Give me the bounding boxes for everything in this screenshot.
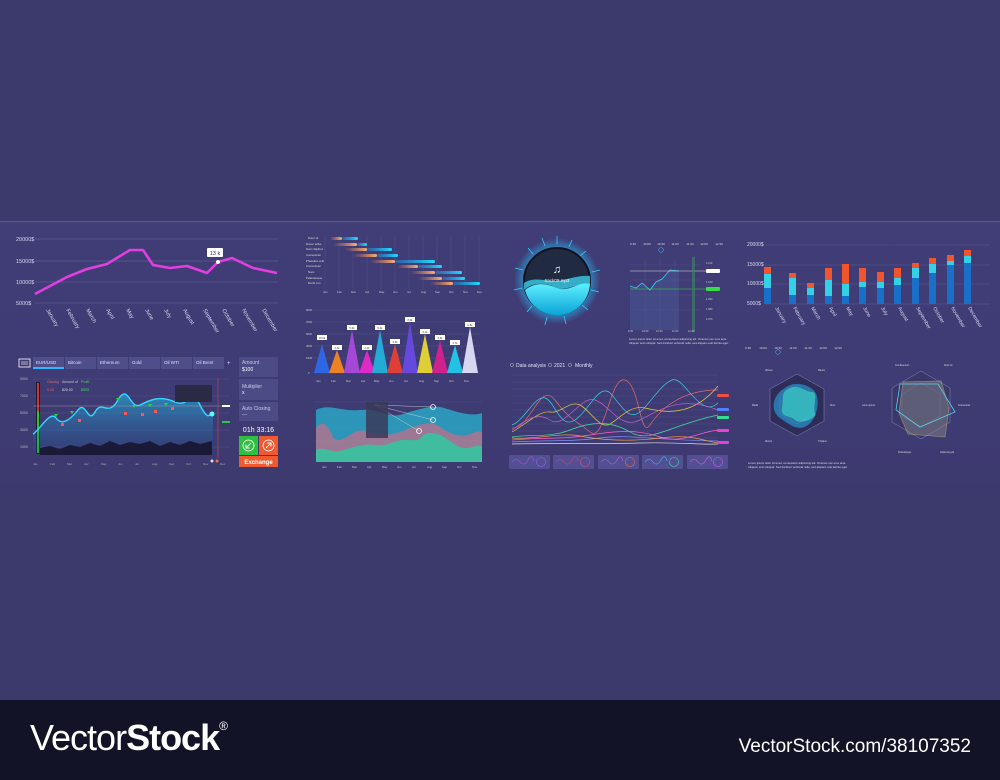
panel: music player [514,236,600,325]
panel: stacked 3D bar chart: May [844,306,854,318]
panel: stacked 3D bar chart: January [773,306,788,325]
month labels: December [260,308,278,333]
month labels: September [201,308,220,334]
panel: small time line chart: 1.110 [706,261,713,265]
panel: stacked 3D bar chart: February [791,306,807,327]
panel: layered area chart: Apr [367,465,371,469]
panel: small time line chart: 1.070 [706,317,713,321]
panel: stacked 3D bar chart: August [896,306,910,323]
multiplier box: Multiplier [242,384,262,390]
panel: gantt chart: May [379,290,385,294]
panel: small time line chart: 11:30 [688,329,695,333]
panel: cone spike chart: Nov [464,379,470,383]
chart area: 9000 [20,377,28,381]
y axis labels: 5000$ [16,301,31,307]
caption: Lorem ipsum dolor sit amet, consectetur adipiscing elit. Vivamus nec eros ante. [748,461,846,465]
tabs: Ethereum [100,360,120,365]
panel: cone spike chart: 5.0k [378,326,383,330]
chart area: Jan [33,462,38,466]
panel: cone spike chart: 4.3k [438,336,443,340]
chart area: 5000 [20,411,28,415]
caption [748,461,848,469]
tabs: EUR/USD [36,360,57,365]
tabs: Gold [132,360,142,365]
panel: stacked 3D bar chart: 15000$ [747,262,764,268]
panel: cone spike chart: 5.1k [423,330,428,334]
panel: gantt chart: Mar [351,290,356,294]
logo text: VectorStock® [30,717,227,758]
month labels: May [124,308,135,320]
panel: small time line chart: 11:00 [672,329,679,333]
panel: cone spike chart: May [374,379,380,383]
panel: layered area chart: Aug [427,465,432,469]
panel: gantt chart: Jul [407,290,411,294]
panel: cone spike chart: 5000 [306,332,313,336]
panel: cone spike chart: Jan [316,379,321,383]
buttons [239,436,258,455]
panel: gantt chart: Feb [337,290,342,294]
panel: layered area chart: Jul [412,465,416,469]
chart area: Feb [50,462,56,466]
panel: layered area chart: Feb [337,465,342,469]
chart area: 7000 [20,394,28,398]
panel: cone spike chart: 5.0k [350,326,355,330]
tooltip 13 k: 13 k [210,251,220,257]
panel: stacked 3D bar chart: 5000$ [747,301,761,307]
month labels: July [162,308,172,320]
month labels: March [84,308,97,324]
chart area: $20.00 [62,388,73,392]
panel: layered area chart: Mar [352,465,357,469]
chart area: Mar [67,462,72,466]
panel: cone spike chart: 15.0k [319,336,326,340]
panel: stacked 3D bar chart: September [914,306,932,330]
glow ring [514,238,600,324]
month labels: June [143,308,154,321]
panel: gantt chart [306,235,483,294]
panel: small time line chart: 10:30 [657,242,665,246]
chart area: Jul [135,462,139,466]
y axis labels: 15000$ [16,259,34,265]
panel: radar charts: 10:00 [759,346,767,350]
panel: small time line chart: 1.100 [706,280,713,284]
chart area: May [101,462,107,466]
panel: small time line chart: 10:00 [642,329,649,333]
chart area: 1000 [20,445,28,449]
panel: gantt chart: Aug [421,290,426,294]
panel: stacked 3D bar chart: June [861,306,872,319]
panel: radar charts: Ultrices [765,369,774,372]
panel: radar charts: Adipiscing elit [940,451,954,454]
panel: small time line chart: 1.090 [706,297,713,301]
amount box: Amount [242,360,260,366]
caption: Aliquam erat volutpat. Sed tincidunt vehicula nulla, sed aliquam erat lacinia eget. [629,341,729,345]
chart area: $333 [81,388,89,392]
panel: gantt chart: Dolor sit [308,236,318,240]
panel: radar charts: 12:00 [819,346,827,350]
panel: small time line chart: 10:00 [643,242,651,246]
icon: monitor [19,359,30,367]
panel: layered area chart: Jun [397,465,402,469]
panel: radar charts: 11:30 [804,346,812,350]
panel: gantt chart: Donec tellus [306,242,322,246]
header legend: Monthly [575,363,593,369]
panel: gantt chart: Nov [463,290,469,294]
panel: gantt chart: Consectetur [306,264,321,268]
panel: small time line chart: 12:30 [715,242,723,246]
tabs [33,357,231,369]
panel: cone spike chart: 1000 [306,356,313,360]
chart area: Closing [47,380,59,384]
panel: stacked 3D bar chart [747,242,990,330]
panel: data analysis multi-line chart [509,363,729,469]
panel: cone spike chart: Sep [434,379,439,383]
footer: watermark bar [0,700,1000,780]
panel: small time line chart [628,242,729,345]
header legend: 2021 [554,363,565,369]
url text: VectorStock.com/38107352 [739,736,971,757]
panel: gantt chart: Jun [393,290,398,294]
panel: layered area chart: Oct [457,465,462,469]
panel: gantt chart: Morbi non [308,281,321,285]
panel: stacked 3D bar chart: 10000$ [747,281,764,287]
tooltip 13 k [207,248,223,264]
y axis labels [16,237,34,307]
icon: music note: ♫ [553,264,561,276]
panel: stacked 3D bar chart: November [949,306,966,329]
auto closing box: Auto Closing [242,406,271,412]
panel: cone spike chart: 2.4k [365,346,370,350]
panel: radar charts: Dictum [765,440,772,443]
panel: small time line chart: 10:30 [656,329,663,333]
panel: stacked 3D bar chart: 20000$ [747,242,764,248]
panel: stacked 3D bar chart: December [966,306,983,329]
panel: small time line chart: 1.080 [706,307,713,311]
panel: radar charts: Mauris [818,369,826,372]
panel: gantt chart: Dec [477,290,483,294]
panel: cone spike chart: 6.5k [468,323,473,327]
panel: gantt chart: Sep [435,290,440,294]
timer: 01h 33:16 [243,427,274,434]
tabs: Bitcoin [68,360,82,365]
panel: cone spike chart: Feb [331,379,336,383]
month labels: January [44,308,59,328]
panel: radar charts: 10:30 [774,346,782,350]
chart area [20,377,230,466]
panel: gantt chart: Nunc dapibus [306,247,324,251]
chart area: 0.20 [47,388,54,392]
radar 2 [892,371,955,439]
magenta line [35,250,277,294]
chart area: Jun [118,462,123,466]
panel: cone spike chart [306,308,480,383]
panel: cone spike chart: 2.4k [335,346,340,350]
y axis labels: 10000$ [16,280,34,286]
auto closing box [239,402,278,421]
chart area: Dec [220,462,226,466]
panel: radar charts [745,346,971,469]
panel: layered area chart [314,402,482,469]
y axis labels: 20000$ [16,237,34,243]
panel: stacked 3D bar chart: July [879,306,889,317]
panel: stacked 3D bar chart: March [809,306,822,321]
chart area: Amount of [62,380,78,384]
header legend: Data analysis [516,363,547,369]
panel: small time line chart: 9:30 [628,329,634,333]
month labels: November [240,308,258,333]
panel: trading chart [19,357,231,466]
header legend [510,363,593,369]
chart area: Apr [84,462,89,466]
radar 1 [770,374,824,436]
panel: cone spike chart: Jun [389,379,394,383]
multiplier box [239,379,278,400]
multiplier box: x [242,390,245,396]
panel: gantt chart: Nunc [308,270,315,274]
panel: cone spike chart: 0 [308,371,310,375]
panel: cone spike chart: 9000 [306,308,313,312]
panel: gantt chart: Jan [323,290,328,294]
panel: radar charts: Consectetur [958,404,971,407]
panel: small time line chart: 12:00 [700,242,708,246]
panel: stacked 3D bar chart: October [931,306,946,325]
panel: radar charts: Dolor sit [944,364,953,367]
caption: Lorem ipsum dolor sit amet, consectetur adipiscing elit. Vivamus nec eros ante. [629,337,727,341]
panel: small time line chart: 9:30 [630,242,636,246]
panel: cone spike chart: 4.0k [393,340,398,344]
panel: cone spike chart: Mar [346,379,351,383]
tabs: Oil WTI [164,360,179,365]
panel: small time line chart: 11:30 [686,242,694,246]
panel: cone spike chart: 3000 [306,344,313,348]
chart area: 3000 [20,428,28,432]
panel: cone spike chart: 7000 [306,320,313,324]
panel: layered area chart: Jan [322,465,327,469]
amount box [239,357,278,377]
panel: music player: track09.mp3 [545,278,570,283]
chart area: Sep [169,462,175,466]
panel: radar charts: Lorem ipsum [862,404,875,407]
panel: cone spike chart: Aug [419,379,424,383]
panel: gantt chart: Pellentesque [306,276,323,280]
panel: small time line chart: 11:00 [671,242,679,246]
summary cards [509,455,728,469]
month labels: August [181,308,195,326]
panel: radar charts: 12:30 [834,346,842,350]
panel: layered area chart: Sep [442,465,447,469]
panel: cone spike chart: 8.0k [408,318,413,322]
panel: trade controls: Exchange [244,460,273,466]
chart area: Oct [186,462,191,466]
caption: Aliquam erat volutpat. Sed tincidunt vehicula nulla, sed aliquam erat lacinia eget. [748,465,848,469]
panel: radar charts: Condimentum [895,364,909,367]
panel: layered area chart: Nov [472,465,478,469]
panel: cone spike chart: Oct [449,379,454,383]
panel: gantt chart: Phasellus velit [306,259,324,263]
panel: cone spike chart: Jul [404,379,408,383]
month labels [44,308,278,334]
panel: monthly line chart [16,237,278,334]
panel: radar charts: 9:30 [745,346,751,350]
panel: trade controls [239,357,278,467]
panel: radar charts: Mattis [752,404,759,407]
panel: gantt chart: Consectetur [306,253,321,257]
dashboard band background [0,221,1000,482]
panel: layered area chart: May [382,465,388,469]
panel: stacked 3D bar chart: April [827,306,837,318]
panel: cone spike chart: Apr [361,379,365,383]
month labels: October [220,308,235,328]
panel: radar charts: Tristique [818,440,827,443]
amount box: $100 [242,367,253,373]
panel: radar charts: Pellentesque [898,451,912,454]
panel: gantt chart: Apr [365,290,369,294]
month labels: February [64,308,81,330]
tabs: Oil Brent [196,360,214,365]
panel: radar charts: Nunc [830,405,836,407]
panel: gantt chart: Oct [449,290,454,294]
chart area: Profit [81,380,89,384]
panel: radar charts: 11:00 [789,346,797,350]
auto closing box: — [242,412,247,418]
panel: cone spike chart: 3.7k [453,341,458,345]
tabs: + [227,361,231,367]
month labels: April [104,308,115,321]
caption [629,337,729,345]
chart area: Nov [203,462,209,466]
chart area: Aug [152,462,158,466]
